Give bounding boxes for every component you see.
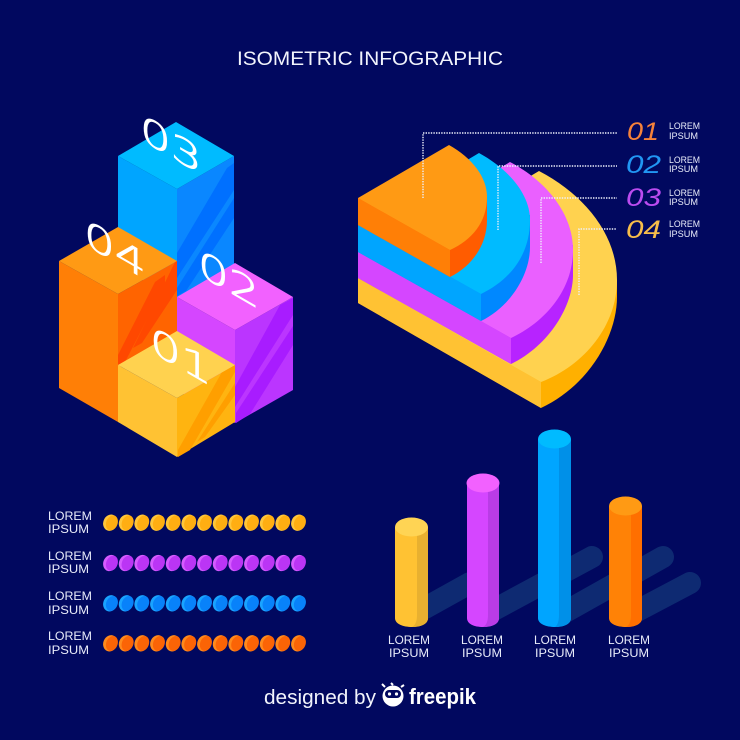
bar label 3 (534, 633, 576, 660)
row 4 orange (48, 629, 308, 657)
bar purple (466, 474, 500, 627)
row 2 purple (48, 549, 308, 576)
legend item 04: 04 (626, 216, 661, 244)
row 4 orange: LOREM (48, 629, 92, 643)
row 2 purple: IPSUM (48, 562, 89, 576)
bar label 1: IPSUM (389, 646, 429, 660)
cube 04 orange (59, 227, 177, 422)
bar orange (609, 496, 642, 627)
bar label 1 (388, 633, 430, 660)
cube number 04: 04 (84, 211, 146, 289)
row 1 yellow: LOREM (48, 509, 92, 523)
bar label 3: LOREM (534, 633, 576, 647)
freepik attribution (264, 683, 477, 709)
legend item 01 (627, 118, 700, 146)
row 3 blue (48, 589, 308, 617)
bar label 4 (608, 633, 650, 660)
isometric cube stack (59, 106, 293, 457)
cube number 03: 03 (140, 106, 202, 184)
layer 01 orange (358, 145, 487, 277)
freepik attribution: designed by (264, 687, 376, 709)
legend item 02: LOREM (669, 155, 700, 165)
bar label 2 (461, 633, 503, 660)
freepik attribution: freepik (409, 684, 477, 709)
legend item 02: IPSUM (669, 164, 698, 174)
legend item 04 (626, 216, 700, 244)
bar blue (538, 430, 571, 627)
layer 02 blue (358, 153, 530, 321)
bar label 2: LOREM (461, 633, 503, 647)
bar label 1: LOREM (388, 633, 430, 647)
legend item 02: 02 (626, 151, 661, 179)
icon: freepik mascot (382, 683, 404, 706)
legend (626, 118, 700, 244)
cube 02 purple (177, 263, 293, 423)
cube 03 blue (118, 122, 234, 300)
legend item 01: 01 (627, 118, 659, 146)
layer 03 purple (358, 162, 573, 364)
legend item 01: LOREM (669, 121, 700, 131)
bar label 3: IPSUM (535, 646, 575, 660)
row 4 orange: IPSUM (48, 643, 89, 657)
cube number 01: 01 (150, 318, 212, 396)
bar label 4: LOREM (608, 633, 650, 647)
legend item 03: 03 (626, 184, 661, 212)
legend item 02 (626, 151, 700, 179)
row 1 yellow: IPSUM (48, 522, 89, 536)
dotted leader lines (423, 133, 617, 295)
bar label 4: IPSUM (609, 646, 649, 660)
row 2 purple: LOREM (48, 549, 92, 563)
row 3 blue: IPSUM (48, 603, 89, 617)
legend item 01: IPSUM (669, 131, 698, 141)
legend item 03: IPSUM (669, 197, 698, 207)
dot rating rows (48, 509, 308, 657)
bar shadows (425, 557, 690, 612)
bar yellow (395, 518, 428, 627)
layer 04 yellow (358, 171, 617, 408)
cube number 02: 02 (198, 241, 260, 319)
legend item 03 (626, 184, 700, 212)
cylinder bar chart (388, 430, 690, 660)
legend item 04: LOREM (669, 219, 700, 229)
row 1 yellow (48, 509, 308, 536)
cube 01 yellow (118, 331, 235, 457)
isometric layered quarter pie (358, 145, 617, 408)
row 3 blue: LOREM (48, 589, 92, 603)
legend item 04: IPSUM (669, 229, 698, 239)
title: ISOMETRIC INFOGRAPHIC (237, 49, 503, 70)
bar label 2: IPSUM (462, 646, 502, 660)
legend item 03: LOREM (669, 188, 700, 198)
